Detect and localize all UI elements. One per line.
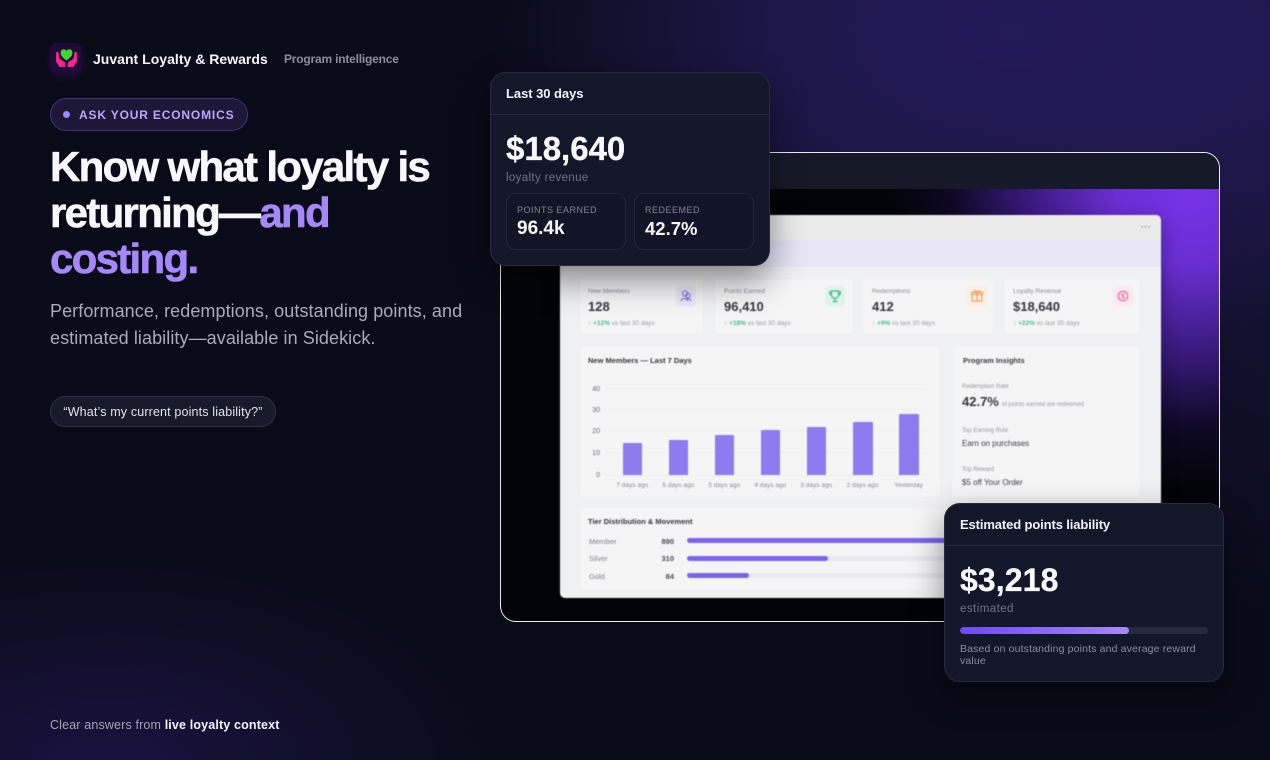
- example question chip: [50, 396, 276, 427]
- KPI: loyalty revenue: $18,640: [1013, 299, 1060, 314]
- panel: screenshot frame: [500, 152, 1220, 622]
- panel: new members bar chart: 20: [592, 428, 600, 435]
- stat: points earned: 96.4k: [517, 218, 565, 239]
- panel: new members bar chart: Yesterday: [894, 482, 923, 489]
- subheading text: [50, 301, 462, 348]
- panel: tier distribution: Gold: [589, 572, 605, 581]
- panel: program insights: Redemption Rate: [962, 384, 1009, 390]
- panel: program insights: Earn on purchases: [962, 439, 1029, 448]
- stat: redeemed: 42.7%: [645, 218, 697, 239]
- main headline: [50, 143, 430, 282]
- dashboard lavender band: [560, 240, 1161, 267]
- panel: tier distribution: 84: [666, 572, 674, 581]
- panel: tier distribution: Member: [589, 537, 617, 546]
- main headline: costing.: [50, 235, 197, 282]
- revenue label: loyalty revenue: [506, 172, 589, 184]
- liability note: value: [960, 655, 986, 667]
- card header: [491, 73, 769, 115]
- panel: new members bar chart: 2 days ago: [847, 482, 878, 489]
- purple glow: [501, 189, 1219, 621]
- revenue value: $18,640: [506, 130, 625, 167]
- dashboard menu dots: ···: [1141, 222, 1151, 232]
- icon: gift: [967, 286, 987, 306]
- stat: points earned: [506, 193, 626, 250]
- panel: new members bar chart: 40: [592, 386, 600, 393]
- KPI: new members: [580, 279, 703, 334]
- panel: program insights: $5 off Your Order: [962, 478, 1023, 487]
- panel: new members bar chart: [580, 346, 940, 497]
- tier title: Tier Distribution & Movement: [588, 517, 692, 526]
- KPI: redemptions: [863, 279, 993, 334]
- KPI: loyalty revenue: [1004, 279, 1140, 334]
- liability value: $3,218: [960, 562, 1058, 598]
- brand name: Juvant Loyalty & Rewards: [93, 51, 268, 67]
- KPI: redemptions: ↑ +9% vs last 30 days: [872, 320, 935, 327]
- liability label: estimated: [960, 603, 1014, 615]
- liability note: [960, 643, 1196, 667]
- icon: members: [676, 286, 696, 306]
- footer note: Clear answers from live loyalty context: [50, 718, 280, 732]
- main headline: returning—and: [50, 189, 329, 236]
- panel: new members bar chart: 30: [592, 407, 600, 414]
- card header: Estimated points liability: [960, 517, 1110, 532]
- panel: new members bar chart: 6 days ago: [662, 482, 694, 489]
- brand tagline: Program intelligence: [284, 52, 399, 66]
- stat: points earned: POINTS EARNED: [517, 205, 597, 215]
- icon: dollar: $: [1121, 294, 1125, 300]
- KPI: points earned: ↑ +18% vs last 30 days: [724, 320, 791, 327]
- stat: redeemed: REDEEMED: [645, 205, 700, 215]
- panel: tier distribution: [580, 508, 1140, 590]
- card header: [945, 504, 1223, 546]
- example question chip: “What’s my current points liability?”: [63, 405, 263, 419]
- stat: redeemed: [634, 193, 754, 250]
- panel: tier distribution: Silver: [589, 554, 608, 563]
- KPI: points earned: 96,410: [724, 299, 764, 314]
- icon: trophy: [825, 286, 845, 306]
- panel: program insights: Top Reward: [962, 467, 994, 473]
- panel: program insights: [952, 346, 1140, 497]
- panel: new members bar chart: 10: [592, 450, 600, 457]
- panel: program insights: 42.7% of points earned are redeemed: [962, 394, 1084, 409]
- panel: new members bar chart: 4 days ago: [754, 482, 786, 489]
- card: estimated points liability: [944, 503, 1224, 682]
- panel: new members bar chart: 0: [596, 472, 600, 479]
- subheading text: estimated liability—available in Sidekick.: [50, 328, 376, 348]
- KPI: new members: New Members: [588, 288, 630, 295]
- dashboard screenshot: [560, 215, 1161, 598]
- card: last 30 days: [490, 72, 770, 266]
- panel: program insights: Top Earning Rule: [962, 428, 1008, 434]
- insights title: Program Insights: [963, 356, 1025, 365]
- eyebrow pill: ASK YOUR ECONOMICS: [79, 108, 234, 122]
- eyebrow pill: [50, 98, 248, 131]
- subheading text: Performance, redemptions, outstanding points, and: [50, 301, 462, 321]
- KPI: points earned: [715, 279, 853, 334]
- KPI: loyalty revenue: Loyalty Revenue: [1013, 288, 1061, 295]
- KPI: new members: ↑ +12% vs last 30 days: [588, 320, 655, 327]
- card header: Last 30 days: [506, 86, 583, 101]
- panel: new members bar chart: 7 days ago: [616, 482, 648, 489]
- panel: tier distribution: 310: [661, 554, 674, 563]
- KPI: redemptions: Redemptions: [872, 288, 910, 295]
- liability note: Based on outstanding points and average reward: [960, 643, 1196, 655]
- chart title: New Members — Last 7 Days: [588, 356, 692, 365]
- brand logo icon: [48, 43, 85, 80]
- KPI: redemptions: 412: [872, 299, 894, 314]
- panel: new members bar chart: 5 days ago: [708, 482, 740, 489]
- liability progress bar: [960, 627, 1208, 634]
- main headline: Know what loyalty is: [50, 143, 429, 190]
- KPI: new members: 128: [588, 299, 610, 314]
- frame top bar: [501, 153, 1219, 189]
- KPI: points earned: Points Earned: [724, 288, 765, 295]
- panel: new members bar chart: 3 days ago: [800, 482, 832, 489]
- panel: tier distribution: 890: [661, 537, 674, 546]
- KPI: loyalty revenue: ↑ +22% vs last 30 days: [1013, 320, 1080, 327]
- icon: dollar: [1113, 286, 1133, 306]
- dashboard title bar: [560, 215, 1161, 240]
